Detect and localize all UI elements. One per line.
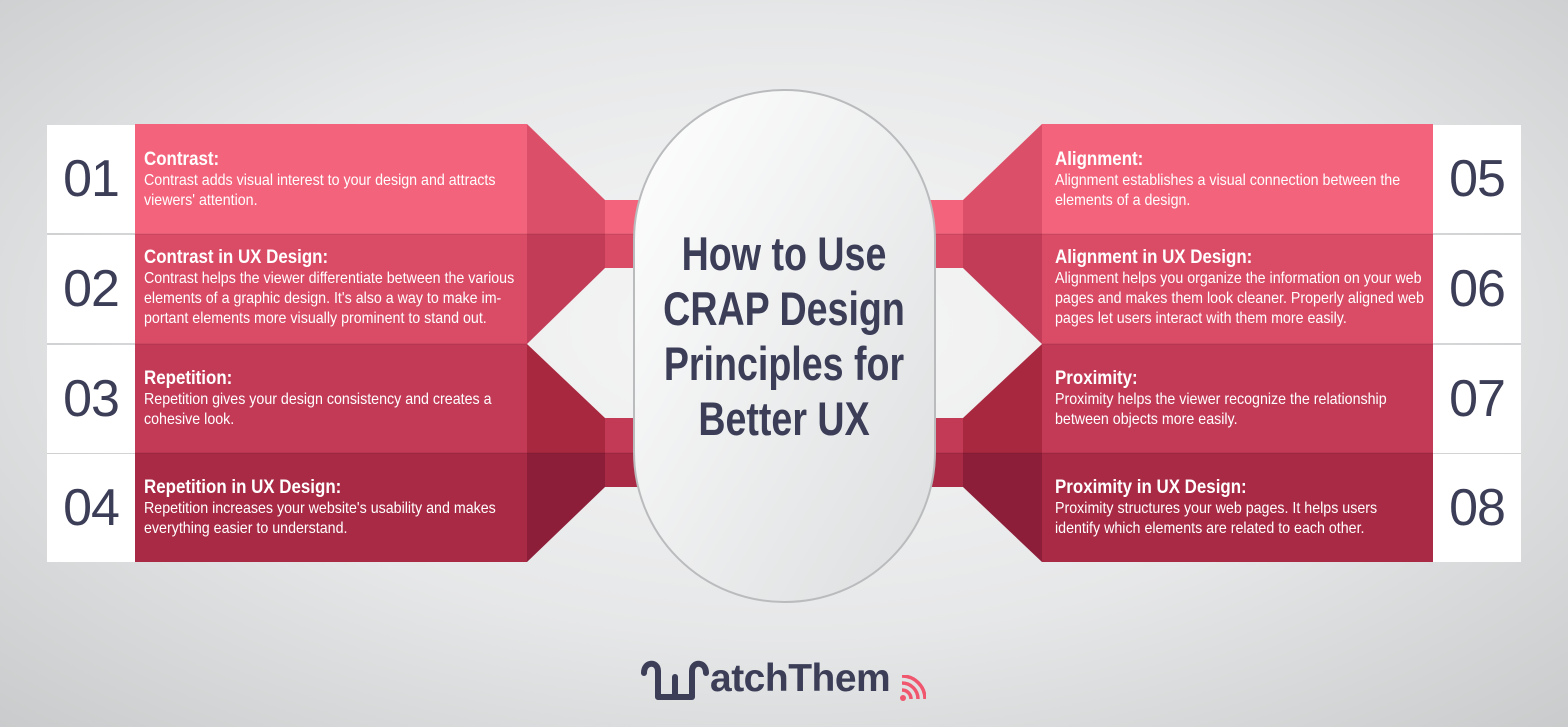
text 05 — [1055, 149, 1400, 209]
text 04: everything easier to understand. — [144, 520, 347, 537]
text 02: elements of a graphic design. It's also a way to make im- — [144, 290, 501, 307]
center pill — [634, 90, 935, 602]
text 07: Proximity: — [1055, 368, 1138, 389]
number 05: 05 — [1449, 150, 1505, 208]
text 02: portant elements more visually prominent to stand out. — [144, 310, 487, 327]
title: Better UX — [698, 392, 870, 445]
text 03: Repetition: — [144, 368, 232, 389]
text 06: pages and makes them look cleaner. Properly aligned web — [1055, 290, 1424, 307]
number 01 — [47, 125, 135, 233]
text 02: Contrast helps the viewer differentiate between the various — [144, 270, 514, 287]
text 01 — [144, 149, 495, 209]
text 06: Alignment helps you organize the information on your web — [1055, 270, 1421, 287]
text 05: elements of a design. — [1055, 192, 1190, 209]
number 08 — [1433, 454, 1521, 562]
number 08: 08 — [1449, 479, 1505, 537]
left band 2 — [135, 234, 640, 344]
number 06: 06 — [1449, 260, 1505, 318]
text 01: Contrast: — [144, 149, 219, 170]
text 02: Contrast in UX Design: — [144, 247, 328, 268]
text 05: Alignment: — [1055, 149, 1143, 170]
text 02 — [144, 247, 514, 327]
text 08: Proximity structures your web pages. It helps users — [1055, 500, 1377, 517]
number 01: 01 — [63, 150, 119, 208]
right band 5 — [928, 124, 1433, 234]
text 03: cohesive look. — [144, 411, 234, 428]
title: Principles for — [664, 337, 904, 390]
text 01: viewers' attention. — [144, 192, 258, 209]
number 06 — [1433, 235, 1521, 343]
number 07 — [1433, 345, 1521, 453]
number 04: 04 — [63, 479, 119, 537]
text 04: Repetition in UX Design: — [144, 477, 341, 498]
title: CRAP Design — [663, 282, 905, 335]
left band 4 — [135, 453, 640, 562]
text 06: Alignment in UX Design: — [1055, 247, 1252, 268]
number 04 — [47, 454, 135, 562]
text 06 — [1055, 247, 1424, 327]
text 07: Proximity helps the viewer recognize the relationship — [1055, 391, 1387, 408]
number 07: 07 — [1449, 370, 1505, 428]
text 04: Repetition increases your website's usability and makes — [144, 500, 496, 517]
text 03: Repetition gives your design consistency and creates a — [144, 391, 492, 408]
text 07: between objects more easily. — [1055, 411, 1238, 428]
text 08 — [1055, 477, 1377, 537]
title — [663, 227, 905, 445]
left band 1 — [135, 124, 640, 234]
text 03 — [144, 368, 492, 428]
left band 3 — [135, 344, 640, 453]
number 03 — [47, 345, 135, 453]
text 01: Contrast adds visual interest to your design and attracts — [144, 172, 495, 189]
logo: atchThem — [710, 657, 890, 700]
number 05 — [1433, 125, 1521, 233]
text 08: Proximity in UX Design: — [1055, 477, 1247, 498]
text 05: Alignment establishes a visual connection between the — [1055, 172, 1400, 189]
right band 6 — [928, 234, 1433, 344]
right band 8 — [928, 453, 1433, 562]
text 06: pages let users interact with them more easily. — [1055, 310, 1347, 327]
number 02 — [47, 235, 135, 343]
title: How to Use — [682, 227, 886, 280]
text 04 — [144, 477, 496, 537]
text 08: identify which elements are related to each other. — [1055, 520, 1365, 537]
number 02: 02 — [63, 260, 119, 318]
text 07 — [1055, 368, 1387, 428]
number 03: 03 — [63, 370, 119, 428]
logo — [641, 657, 926, 701]
right band 7 — [928, 344, 1433, 453]
